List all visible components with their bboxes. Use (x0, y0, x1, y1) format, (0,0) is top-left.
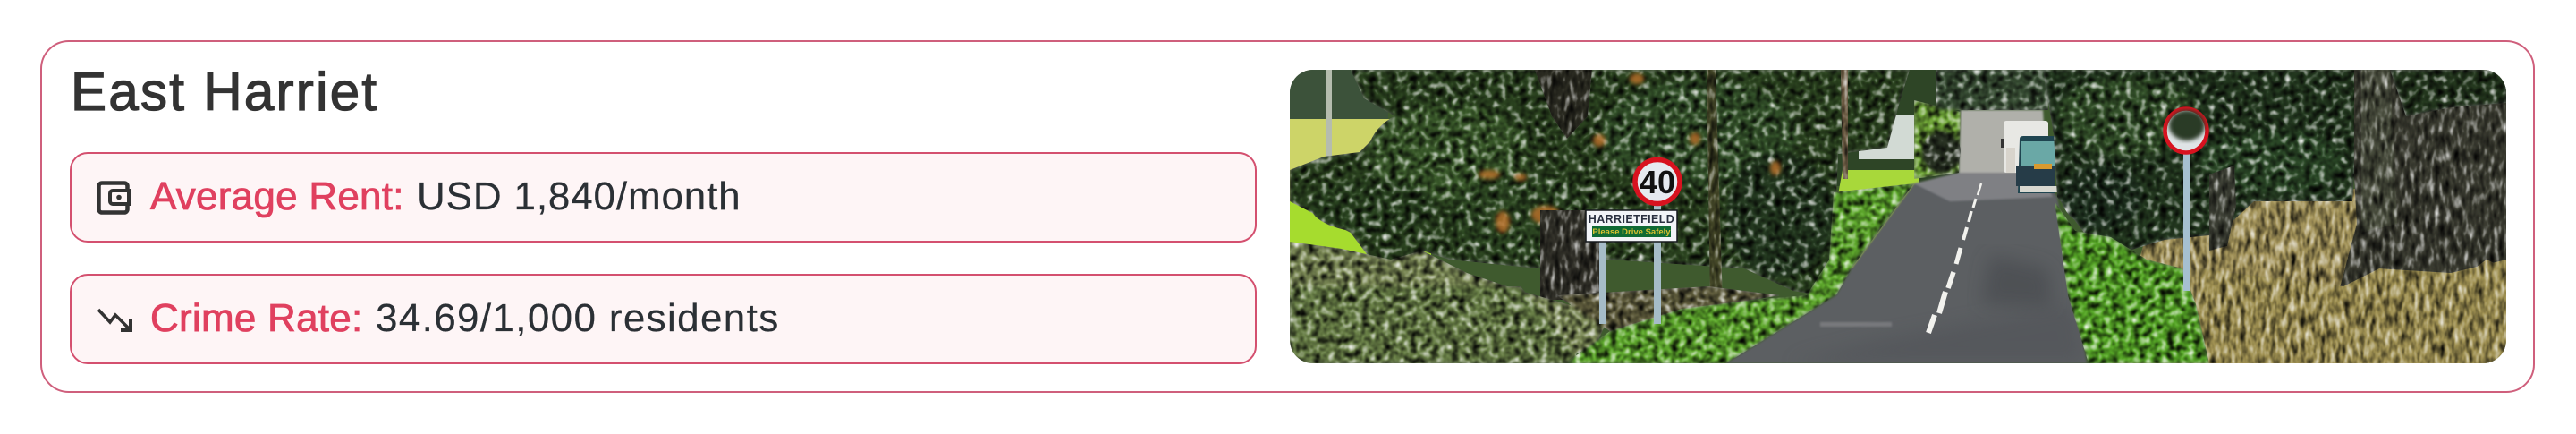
photo: distant hedge (1914, 70, 2048, 179)
icon: wallet (97, 181, 131, 215)
photo: rear of road sign on right (2165, 109, 2207, 291)
value: crime rate: 34.69/1,000 residents (376, 296, 780, 340)
label: crime rate: Crime Rate: (150, 296, 362, 340)
photo: foreground dry grass (2191, 260, 2506, 363)
photo: blue van (2016, 136, 2057, 193)
heading: neighbourhood name: East Harriet (71, 62, 378, 122)
photo: white van (2001, 121, 2048, 173)
photo: grass verge left (1565, 183, 1914, 363)
photo: rural road with Harrietfield town sign (1290, 70, 2506, 363)
label: average rent: Average Rent: (150, 174, 404, 218)
photo: small tree stump (2209, 166, 2236, 251)
photo: large oak trunk (2339, 70, 2506, 291)
photo: oak canopy top right (2390, 70, 2506, 116)
photo: road (1726, 110, 2087, 363)
photo: speed limit and town sign: 40 (1640, 164, 1675, 200)
photo: speed limit and town sign: HARRIETFIELD (1589, 213, 1674, 226)
panel: East Harriet card (40, 40, 2535, 393)
photo: tree trunks (1535, 70, 1848, 304)
photo: roadside shrubs (1290, 242, 1780, 363)
photo: road centre dashes (1928, 183, 1981, 333)
photo: grass verge right (2055, 201, 2209, 363)
photo: road shadows (1986, 260, 2050, 311)
photo: utility pole far left (1326, 70, 1332, 164)
photo: speed limit and town sign: Please Drive Safely (1592, 227, 1671, 237)
photo: speed limit and town sign (1586, 159, 1680, 324)
photo background: sky and fields (1290, 70, 2506, 363)
value: average rent: USD 1,840/month (417, 174, 741, 218)
photo: dry grass right (2111, 188, 2506, 363)
photo: main tree canopy (1290, 70, 1910, 295)
panel: average rent (70, 152, 1257, 243)
panel: crime rate (70, 274, 1257, 364)
icon: trending down arrow (97, 308, 132, 332)
photo: right tree canopy (2043, 70, 2361, 251)
photo: autumn leaves (1479, 73, 1781, 233)
